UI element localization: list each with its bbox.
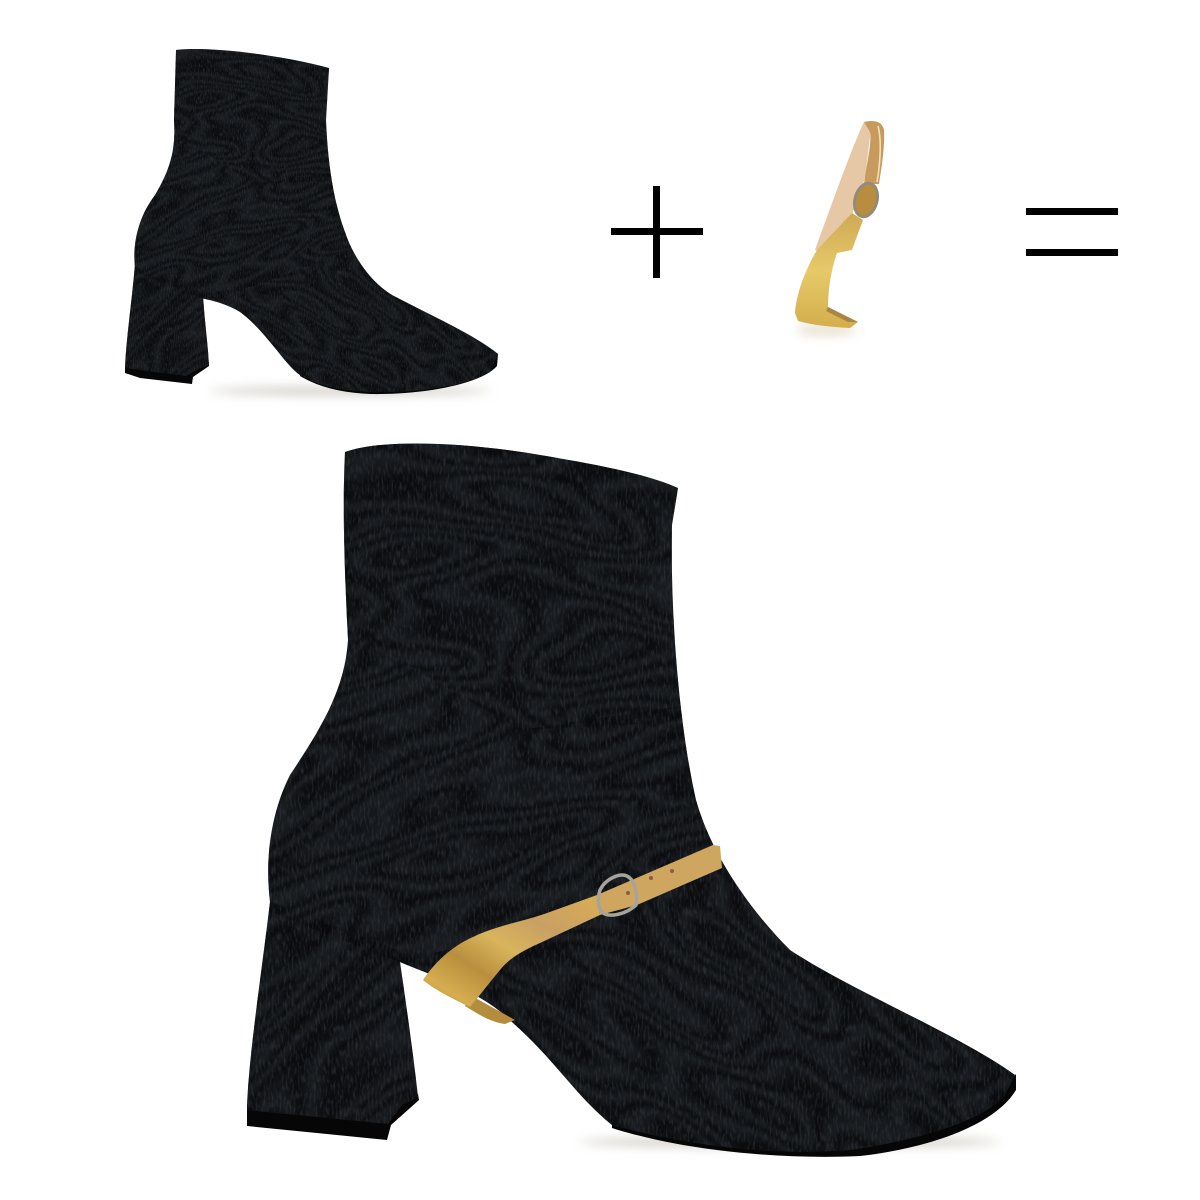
small boot upper [125, 49, 498, 392]
large boot with strap [247, 444, 1016, 1157]
gold strap [423, 895, 600, 1007]
large boot upper [247, 444, 1015, 1152]
strap lining [815, 122, 871, 252]
strap back [864, 121, 884, 184]
strap punch holes [626, 869, 674, 895]
equals sign [1026, 208, 1118, 256]
buckle [598, 875, 637, 915]
gold strap accessory [795, 121, 884, 336]
strap buckle [851, 181, 881, 219]
large boot sole [247, 1074, 1016, 1157]
strap inner tab [465, 995, 515, 1024]
small boot [117, 33, 510, 402]
plus sign [611, 186, 703, 278]
strap foot piece [795, 213, 863, 328]
small boot sole [125, 354, 498, 394]
